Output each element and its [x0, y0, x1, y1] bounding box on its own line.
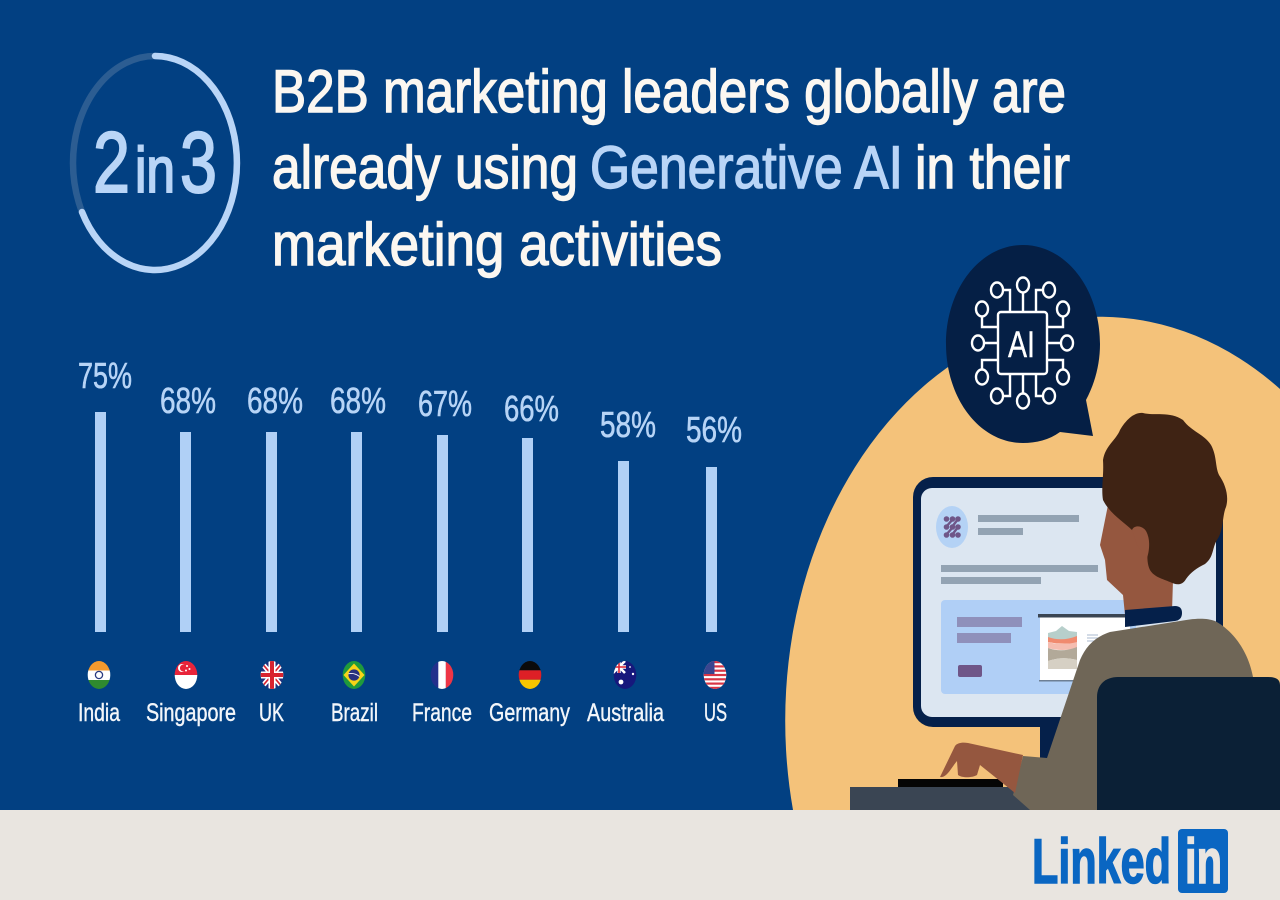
country labels	[78, 699, 727, 727]
country labels: Germany	[489, 699, 570, 727]
percentage values: 68%	[247, 380, 303, 421]
monitor	[913, 477, 1223, 760]
percentage values: 68%	[330, 380, 386, 421]
content card	[941, 600, 1136, 694]
ear	[1132, 526, 1149, 558]
flag: Singapore	[174, 661, 198, 689]
collar	[1125, 606, 1182, 627]
speech bubble with AI chip icon	[946, 245, 1100, 443]
headline: marketing activities	[272, 211, 722, 278]
headline	[272, 58, 1070, 278]
headline: Generative AI	[590, 134, 903, 201]
flag: Germany	[518, 661, 542, 689]
hand	[940, 743, 1023, 793]
bar chart: adoption by country	[78, 355, 742, 727]
country labels: US	[704, 699, 727, 727]
country labels: UK	[259, 699, 284, 727]
LinkedIn logo: in	[1185, 827, 1222, 897]
neck and face	[1100, 505, 1173, 615]
percentage values: 66%	[504, 388, 559, 429]
country labels: India	[78, 699, 120, 727]
person	[940, 413, 1280, 810]
donut ring: 2 in 3	[73, 56, 237, 270]
stat: 2 in 3: 3	[180, 115, 217, 211]
report preview with layered chart	[1038, 614, 1130, 682]
flag: Brazil	[342, 661, 366, 689]
chip label: AI	[1008, 324, 1035, 365]
percentage values: 75%	[78, 355, 132, 396]
headline: already using	[272, 134, 578, 201]
sweater	[1013, 619, 1260, 810]
flag: Australia	[613, 661, 637, 689]
flag: US	[703, 661, 727, 689]
footer band	[0, 810, 1280, 900]
hair	[1102, 413, 1227, 584]
country labels: Singapore	[146, 699, 236, 727]
country labels: Australia	[587, 699, 664, 727]
percentage values: 58%	[600, 404, 656, 445]
profile logo	[936, 506, 968, 548]
desk and keyboard	[850, 779, 1036, 810]
chair	[1097, 677, 1280, 810]
percentage values: 67%	[418, 383, 472, 424]
country labels: Brazil	[331, 699, 378, 727]
flag: UK	[260, 661, 284, 689]
icon: AI chip	[972, 278, 1073, 408]
peach backdrop	[785, 317, 1280, 810]
stat: 2 in 3	[93, 115, 217, 211]
country labels: France	[412, 699, 472, 727]
percentage values: 56%	[686, 409, 742, 450]
illustration: marketer at computer	[785, 245, 1280, 810]
bars	[95, 412, 717, 632]
stat: 2 in 3: 2	[93, 115, 130, 211]
placeholder text lines	[941, 515, 1098, 584]
flag: France	[430, 661, 454, 689]
percentage values	[78, 355, 742, 450]
percentage values: 68%	[160, 380, 216, 421]
headline: in their	[915, 134, 1070, 201]
stat: 2 in 3: in	[135, 134, 175, 206]
LinkedIn logo: Linked	[1032, 827, 1171, 897]
headline: B2B marketing leaders globally are	[272, 58, 1066, 125]
flag: India	[87, 661, 111, 689]
